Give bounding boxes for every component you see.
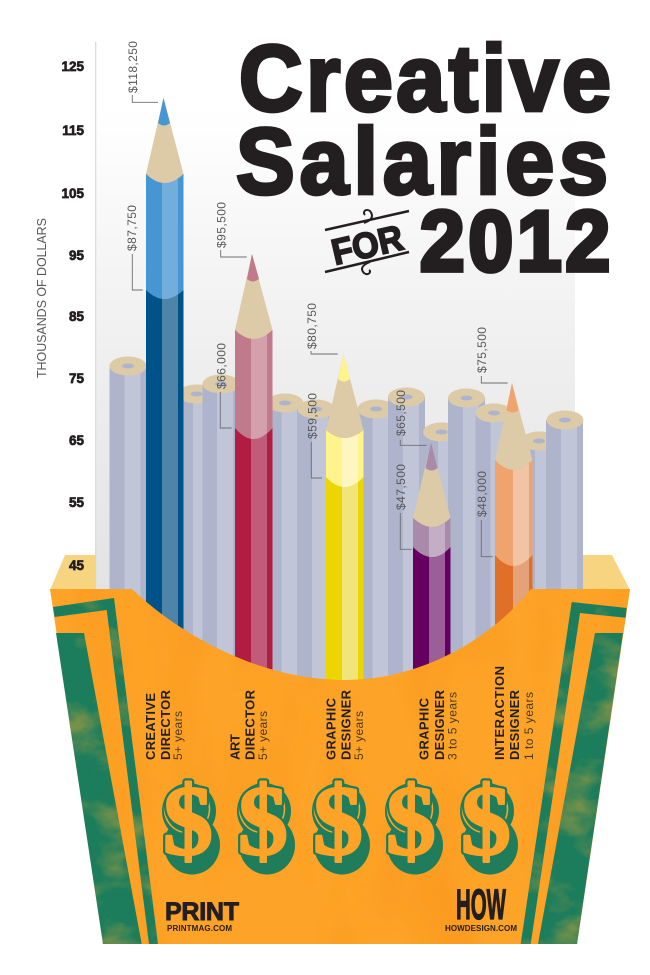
title: 2012 — [420, 193, 610, 289]
title: Creative — [239, 27, 611, 131]
print logo: PRINTMAG.COM — [167, 924, 232, 933]
how logo: HOWDESIGN.COM — [445, 924, 517, 933]
back of fry box — [50, 555, 630, 590]
job label: interaction designer: 1 to 5 years — [522, 692, 536, 760]
dollar sign 3: $ — [313, 765, 363, 876]
dollar sign 4: $ — [386, 765, 436, 876]
job label: graphic designer 5+ years: GRAPHIC — [324, 697, 338, 760]
dollar sign icons — [162, 765, 518, 876]
green border right — [521, 602, 627, 944]
dollar sign 5: $ — [461, 765, 511, 876]
dollar sign 2: $ — [238, 765, 288, 876]
y axis labels: 125 — [61, 59, 84, 74]
job label: graphic designer 5+ years: DESIGNER — [338, 689, 354, 760]
green border left — [53, 598, 158, 944]
job label: art director — [228, 689, 270, 760]
y axis labels: 95 — [69, 248, 84, 263]
job label: graphic designer 3 to 5 years — [416, 689, 460, 760]
y axis labels: 65 — [69, 433, 84, 448]
job label: graphic designer 5+ years: 5+ years — [352, 711, 366, 760]
title — [236, 27, 611, 289]
job label: graphic designer 3 to 5 years: GRAPHIC — [416, 697, 432, 760]
dollar sign 1: $ — [163, 765, 213, 876]
job label: art director: 5+ years — [256, 711, 270, 760]
y axis labels — [61, 59, 84, 573]
y axis labels: 115 — [62, 123, 84, 138]
job label: creative director: CREATIVE — [143, 693, 158, 760]
purple pencil: graphic designer 3 to 5 years — [413, 442, 450, 678]
salary value labels: $48,000 — [475, 471, 489, 517]
dollar sign 2: $ — [238, 765, 288, 876]
salary value labels: $80,750 — [305, 303, 319, 349]
job label: graphic designer 3 to 5 years: 3 to 5 years — [446, 692, 460, 760]
salary value labels — [125, 41, 489, 517]
salary value labels: $47,500 — [394, 464, 408, 510]
job label: art director: DIRECTOR — [242, 689, 258, 760]
fry box front — [50, 589, 630, 944]
job label: interaction designer — [492, 666, 536, 760]
pink pencil: art director — [235, 254, 272, 690]
y axis title: THOUSANDS OF DOLLARS — [35, 218, 49, 378]
salary value labels: $95,500 — [214, 202, 228, 248]
dollar sign 1: $ — [163, 765, 213, 876]
job label: graphic designer 3 to 5 years: DESIGNER — [432, 689, 447, 760]
dollar sign 5: $ — [461, 765, 511, 876]
salary value labels: $66,000 — [214, 343, 228, 389]
yellow pencil: graphic designer 5+ years — [326, 354, 364, 690]
dollar sign 4: $ — [386, 765, 436, 876]
y axis labels: 85 — [69, 309, 84, 324]
print logo: PRINT — [165, 898, 239, 926]
job label: creative director: 5+ years — [171, 711, 185, 760]
job label: creative director: DIRECTOR — [158, 689, 173, 760]
salary value labels: $59,500 — [306, 393, 320, 439]
salary value labels: $87,750 — [125, 205, 139, 251]
job label: interaction designer: DESIGNER — [507, 689, 522, 760]
salary value labels: $75,500 — [475, 327, 489, 373]
y axis labels: 55 — [69, 495, 84, 510]
y axis labels: 45 — [69, 558, 84, 573]
job label: art director: ART — [228, 734, 242, 760]
chart background panel — [95, 42, 575, 590]
y axis labels: 75 — [69, 371, 84, 386]
for ornament: FOR — [328, 217, 407, 273]
how logo — [445, 881, 517, 933]
job label: graphic designer 5+ years — [324, 689, 366, 760]
orange pencil: interaction designer — [495, 383, 532, 640]
how logo: HOW — [456, 881, 506, 929]
blue pencil: creative director — [146, 98, 184, 630]
salary value labels: $65,500 — [394, 390, 408, 436]
unsharpened gray pencils, back row — [110, 356, 584, 696]
y axis labels: 105 — [61, 186, 84, 201]
salary value labels: $118,250 — [126, 41, 140, 93]
job label: interaction designer: INTERACTION — [492, 666, 507, 760]
job label: creative director — [143, 689, 185, 760]
dollar sign 3: $ — [313, 765, 363, 876]
leader lines — [132, 95, 508, 557]
title: Salaries — [236, 110, 608, 214]
